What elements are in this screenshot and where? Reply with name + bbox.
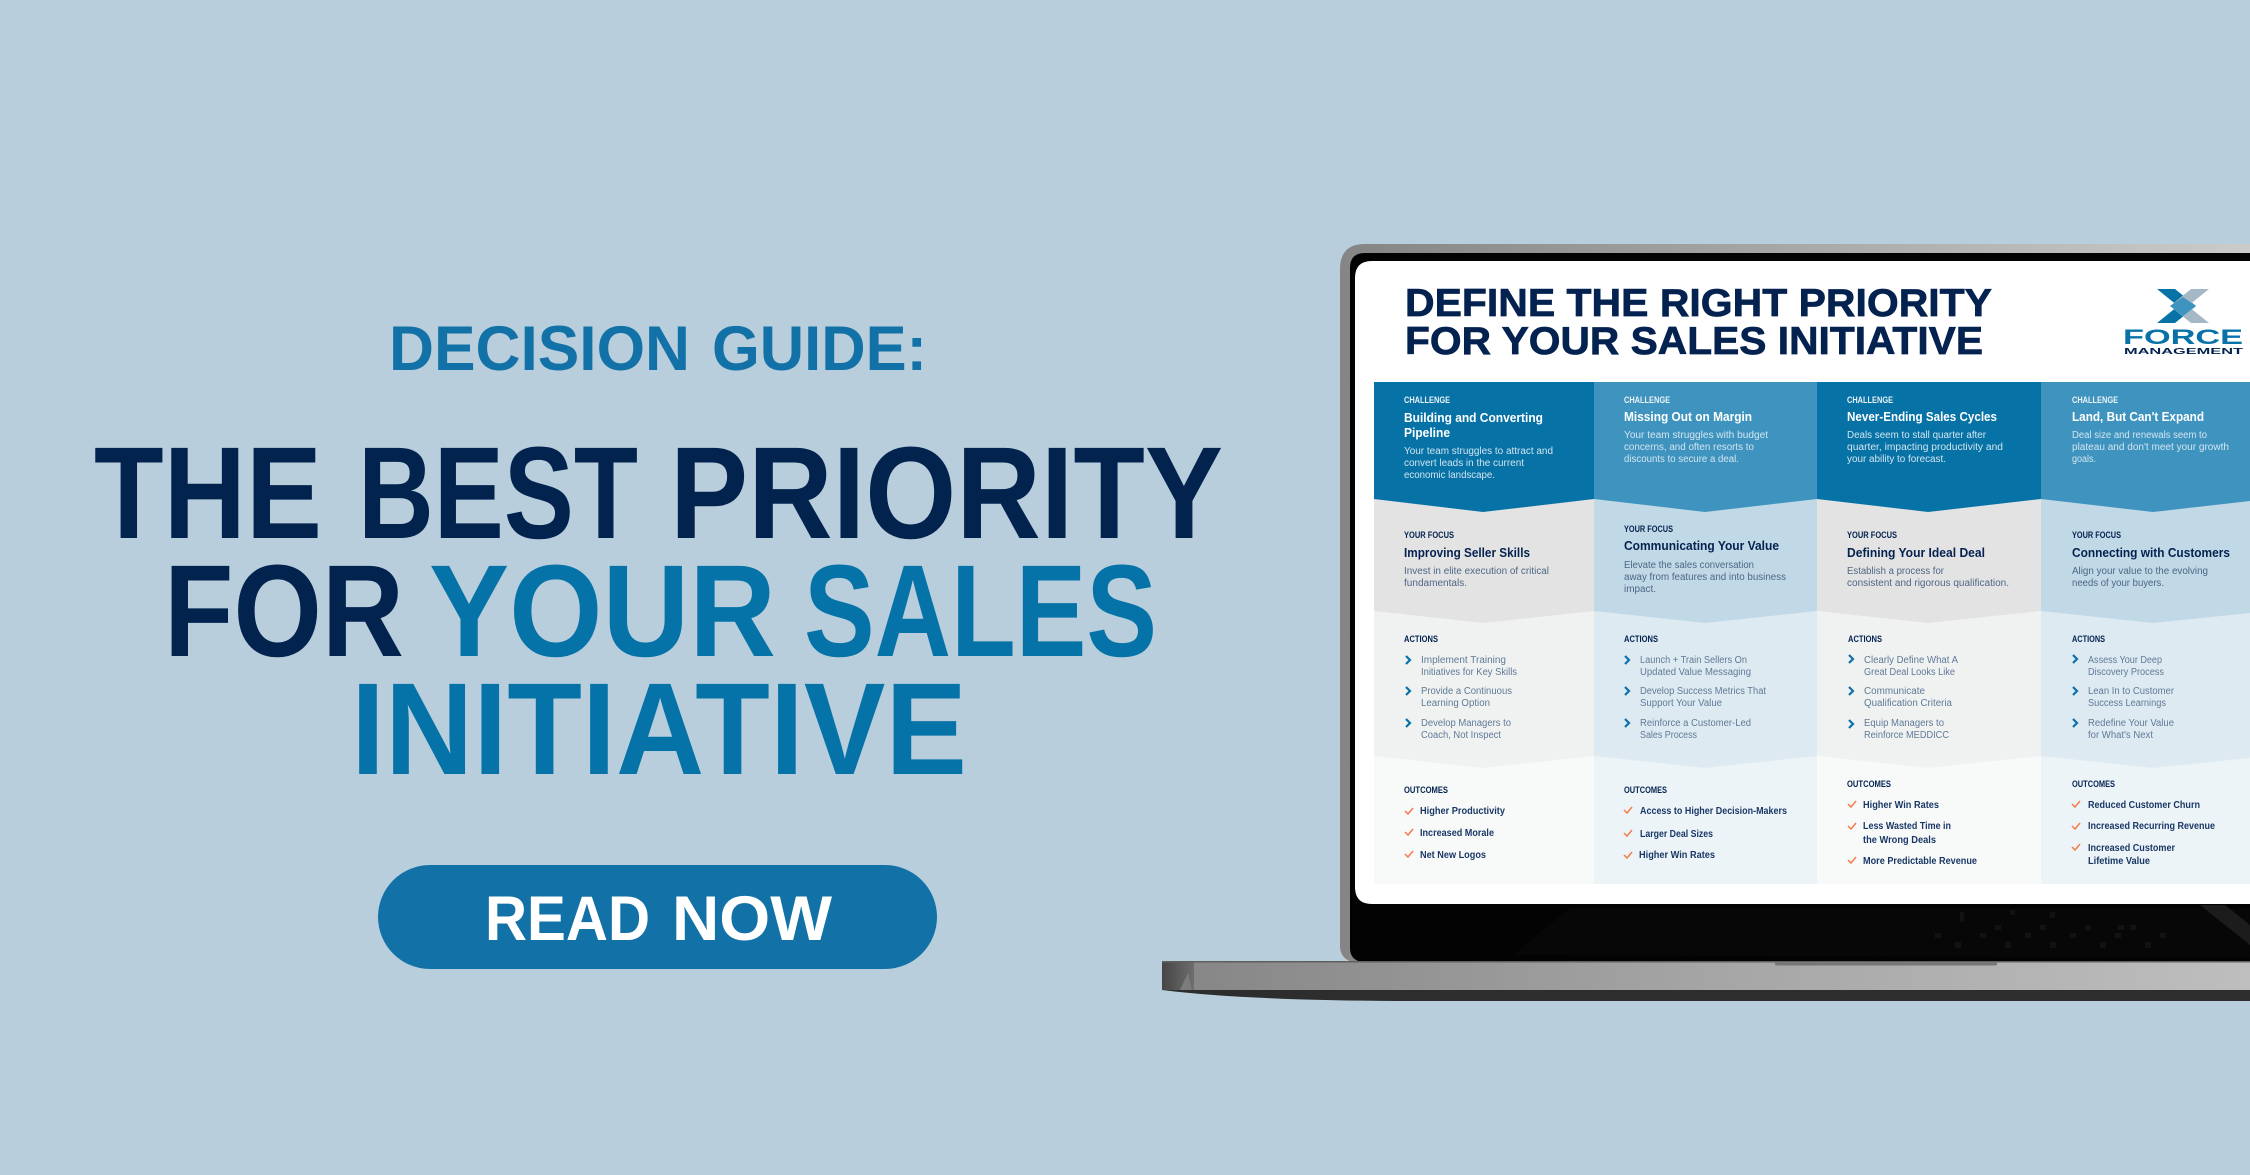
challenge text: plateau and don't meet your growth <box>2072 442 2229 453</box>
actions list: ACTIONS <box>1404 634 1438 644</box>
actions list: Discovery Process <box>2088 667 2164 678</box>
laptop lid bezel <box>1340 244 2250 962</box>
challenge text: Deals seem to stall quarter after <box>1847 430 1987 441</box>
challenge text: CHALLENGE <box>1404 395 1450 405</box>
guide title: DEFINE THE RIGHT PRIORITY <box>1405 282 1992 325</box>
eyebrow heading <box>389 314 927 384</box>
focus text: Improving Seller Skills <box>1404 545 1530 560</box>
focus text: YOUR FOCUS <box>1404 530 1454 540</box>
actions list: Clearly Define What A <box>1864 655 1958 666</box>
outcomes list: Less Wasted Time in <box>1863 821 1951 832</box>
focus text: needs of your buyers. <box>2072 578 2164 589</box>
actions list <box>1624 634 1766 741</box>
challenge text <box>1624 395 1768 465</box>
outcomes list: OUTCOMES <box>2072 779 2115 789</box>
logo: force management: FORCE <box>2123 326 2243 349</box>
outcomes list <box>2072 779 2215 867</box>
guide title <box>1405 282 1992 363</box>
outcomes list: Higher Win Rates <box>1863 800 1939 811</box>
focus text: impact. <box>1624 584 1656 595</box>
actions list: Communicate <box>1864 686 1925 697</box>
challenge text: convert leads in the current <box>1404 458 1524 469</box>
challenge text <box>1847 395 2003 465</box>
challenge text: CHALLENGE <box>1847 395 1893 405</box>
actions list: Redefine Your Value <box>2088 718 2174 729</box>
outcomes list: Access to Higher Decision-Makers <box>1640 806 1787 817</box>
outcomes list: Increased Customer <box>2088 843 2175 854</box>
column 1: building pipeline <box>1404 395 1553 861</box>
challenge text: Deal size and renewals seem to <box>2072 430 2207 441</box>
challenge text: Your team struggles to attract and <box>1404 446 1553 457</box>
main headline <box>94 419 1223 802</box>
focus text: YOUR FOCUS <box>1847 530 1897 540</box>
actions list: Reinforce MEDDICC <box>1864 730 1949 741</box>
focus text: Align your value to the evolving <box>2072 566 2208 577</box>
outcomes list: Increased Morale <box>1420 828 1494 839</box>
outcomes list: OUTCOMES <box>1404 785 1448 795</box>
actions list: Implement Training <box>1421 655 1506 666</box>
actions list: Qualification Criteria <box>1864 698 1952 709</box>
focus text: Establish a process for <box>1847 566 1945 577</box>
challenge text: your ability to forecast. <box>1847 454 1946 465</box>
focus text <box>1404 530 1549 589</box>
focus text: Elevate the sales conversation <box>1624 560 1754 571</box>
focus text: Communicating Your Value <box>1624 538 1779 553</box>
outcomes list: OUTCOMES <box>1624 785 1667 795</box>
outcomes list <box>1624 785 1787 861</box>
challenge text: discounts to secure a deal. <box>1624 454 1739 465</box>
challenge text: quarter, impacting productivity and <box>1847 442 2003 453</box>
main headline: PRIORITY <box>670 419 1223 566</box>
actions list: ACTIONS <box>1848 634 1882 644</box>
focus text: Invest in elite execution of critical <box>1404 566 1549 577</box>
keyboard reflection <box>1513 905 2250 958</box>
laptop black frame <box>1350 253 2250 962</box>
laptop illustration <box>1162 244 2250 1001</box>
outcomes list <box>1404 785 1505 861</box>
focus text <box>2072 530 2230 589</box>
outcomes list: OUTCOMES <box>1847 779 1891 789</box>
actions list: Develop Managers to <box>1421 718 1511 729</box>
actions list: Learning Option <box>1421 698 1490 709</box>
column 2: missing out on margin <box>1624 395 1787 861</box>
challenge text: CHALLENGE <box>2072 395 2118 405</box>
focus text: YOUR FOCUS <box>2072 530 2121 540</box>
logo: force management: MANAGEMENT <box>2124 347 2243 356</box>
column 4: land but can't expand <box>2072 395 2230 867</box>
actions list: ACTIONS <box>2072 634 2105 644</box>
outcomes list: Net New Logos <box>1420 850 1486 861</box>
actions list: Develop Success Metrics That <box>1640 686 1766 697</box>
eyebrow heading: DECISION <box>389 314 690 384</box>
challenge text: CHALLENGE <box>1624 395 1670 405</box>
actions list: Sales Process <box>1640 730 1697 741</box>
actions list <box>1404 634 1517 741</box>
eyebrow heading: GUIDE: <box>712 314 927 384</box>
actions list: for What's Next <box>2088 730 2153 741</box>
outcomes list: Higher Productivity <box>1420 806 1505 817</box>
actions list: Reinforce a Customer-Led <box>1640 718 1751 729</box>
guide title: FOR YOUR SALES INITIATIVE <box>1405 320 1983 363</box>
challenge text: Never-Ending Sales Cycles <box>1847 409 1997 424</box>
focus band backgrounds <box>1374 490 2250 623</box>
focus text: consistent and rigorous qualification. <box>1847 578 2009 589</box>
actions band backgrounds <box>1374 600 2250 768</box>
actions list: Support Your Value <box>1640 698 1722 709</box>
column 3: never-ending sales cycles <box>1847 395 2009 867</box>
actions list: Provide a Continuous <box>1421 686 1512 697</box>
screen <box>1355 261 2250 904</box>
challenge text: goals. <box>2072 454 2096 465</box>
button: read now <box>378 865 937 969</box>
actions list: ACTIONS <box>1624 634 1658 644</box>
actions list: Launch + Train Sellers On <box>1640 655 1747 666</box>
actions list: Coach, Not Inspect <box>1421 730 1501 741</box>
actions list: Success Learnings <box>2088 698 2166 709</box>
challenge text: economic landscape. <box>1404 470 1495 481</box>
outcomes list: More Predictable Revenue <box>1863 856 1977 867</box>
focus text: fundamentals. <box>1404 578 1467 589</box>
main headline: BEST <box>358 419 638 566</box>
logo: force management <box>2123 289 2243 356</box>
actions list: Assess Your Deep <box>2088 655 2162 666</box>
challenge text: Your team struggles with budget <box>1624 430 1768 441</box>
outcomes list: Reduced Customer Churn <box>2088 800 2200 811</box>
main headline: SALES <box>804 537 1157 684</box>
laptop base <box>1162 961 2250 1001</box>
actions list: Lean In to Customer <box>2088 686 2175 697</box>
button: read now: READ <box>485 884 650 954</box>
outcomes list: the Wrong Deals <box>1863 835 1936 846</box>
main headline: FOR <box>164 537 404 684</box>
challenge text: Pipeline <box>1404 425 1450 440</box>
focus text: Connecting with Customers <box>2072 545 2230 560</box>
actions list: Great Deal Looks Like <box>1864 667 1955 678</box>
main headline: YOUR <box>429 537 776 684</box>
main headline: INITIATIVE <box>351 655 967 802</box>
challenge band backgrounds <box>1374 382 2250 512</box>
actions list: Initiatives for Key Skills <box>1421 667 1517 678</box>
outcomes list: Larger Deal Sizes <box>1640 829 1713 840</box>
focus text: Defining Your Ideal Deal <box>1847 545 1985 560</box>
challenge text <box>2072 395 2229 465</box>
outcomes list <box>1847 779 1977 867</box>
focus text <box>1847 530 2009 589</box>
challenge text: Land, But Can't Expand <box>2072 409 2204 424</box>
outcomes band backgrounds <box>1374 740 2250 884</box>
actions list <box>1848 634 1958 741</box>
challenge text: concerns, and often resorts to <box>1624 442 1754 453</box>
actions list: Updated Value Messaging <box>1640 667 1751 678</box>
left text block <box>94 314 1223 969</box>
challenge text: Missing Out on Margin <box>1624 409 1752 424</box>
outcomes list: Higher Win Rates <box>1639 850 1715 861</box>
focus text: YOUR FOCUS <box>1624 524 1673 534</box>
outcomes list: Increased Recurring Revenue <box>2088 821 2215 832</box>
button: read now: NOW <box>672 884 833 954</box>
actions list <box>2072 634 2175 741</box>
challenge text <box>1404 395 1553 481</box>
actions list: Equip Managers to <box>1864 718 1944 729</box>
focus text: away from features and into business <box>1624 572 1786 583</box>
main headline: THE <box>94 419 322 566</box>
focus text <box>1624 524 1786 595</box>
outcomes list: Lifetime Value <box>2088 856 2150 867</box>
challenge text: Building and Converting <box>1404 410 1543 425</box>
